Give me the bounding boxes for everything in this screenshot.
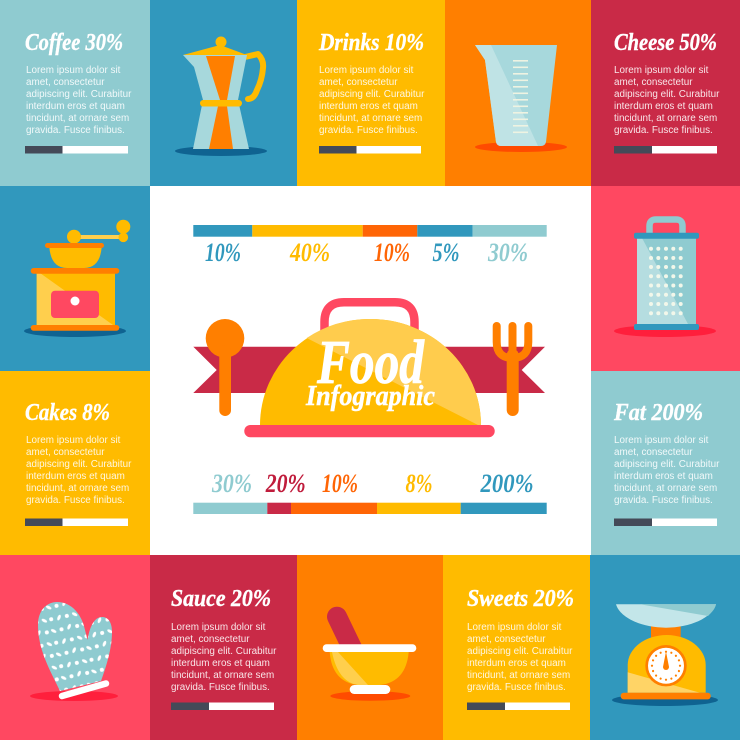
text block: sauce: adipiscing elit. Curabitur <box>171 646 277 657</box>
icon: mortar and pestle <box>323 617 416 701</box>
text block: cakes: tincidunt, at ornare sem <box>26 483 129 494</box>
progress bar: sauce <box>171 702 274 710</box>
title <box>305 329 436 412</box>
panel: cakes <box>25 400 132 526</box>
heading: drinks: Drinks 10% <box>318 30 424 56</box>
text block: cheese: amet, consectetur <box>614 77 693 88</box>
text block: drinks: amet, consectetur <box>319 77 398 88</box>
bottom percentage labels: 20% <box>265 469 306 498</box>
panel: cheese <box>614 30 720 154</box>
text block: cakes: gravida. Fusce finibus. <box>26 495 125 506</box>
bottom percentage labels <box>211 469 533 498</box>
panel: drinks <box>318 30 425 154</box>
text block: fat: interdum eros et quam <box>614 471 713 482</box>
heading: coffee: Coffee 30% <box>25 30 123 56</box>
icon: coffee grinder <box>24 220 130 337</box>
text block: sweets: interdum eros et quam <box>467 658 566 669</box>
top percentage labels: 10% <box>374 238 410 267</box>
top percentage bar <box>193 225 547 237</box>
icon: moka pot <box>175 36 267 156</box>
text block: cheese: adipiscing elit. Curabitur <box>614 89 720 100</box>
text block: cheese: tincidunt, at ornare sem <box>614 113 717 124</box>
progress bar: cakes <box>25 518 128 526</box>
text block: sauce: tincidunt, at ornare sem <box>171 670 274 681</box>
panel: sauce <box>171 586 277 710</box>
top percentage labels <box>205 238 528 267</box>
text block: fat: tincidunt, at ornare sem <box>614 483 717 494</box>
text block: drinks: tincidunt, at ornare sem <box>319 113 422 124</box>
icon: oven mitt <box>30 602 118 701</box>
text block: sauce: amet, consectetur <box>171 634 250 645</box>
title: Food <box>316 329 425 397</box>
top percentage labels: 30% <box>487 238 528 267</box>
text block: fat: Lorem ipsum dolor sit <box>614 435 709 446</box>
top percentage labels: 10% <box>205 238 241 267</box>
bottom percentage labels: 200% <box>480 469 534 498</box>
text block: cakes: Lorem ipsum dolor sit <box>26 435 121 446</box>
heading: cakes: Cakes 8% <box>25 400 110 426</box>
text block: cheese: interdum eros et quam <box>614 101 713 112</box>
cloche dome <box>260 319 481 425</box>
ribbon banner <box>193 347 545 393</box>
text block: coffee: tincidunt, at ornare sem <box>26 113 129 124</box>
text block: drinks: Lorem ipsum dolor sit <box>319 65 414 76</box>
text block: coffee: gravida. Fusce finibus. <box>26 125 125 136</box>
icon: cheese grater <box>614 220 716 337</box>
panel: sweets <box>467 586 574 710</box>
text block: fat: gravida. Fusce finibus. <box>614 495 713 506</box>
top percentage labels: 5% <box>432 238 460 267</box>
heading: sweets: Sweets 20% <box>467 586 574 612</box>
cloche plate <box>244 425 495 437</box>
text block: sauce: Lorem ipsum dolor sit <box>171 622 266 633</box>
text block: sauce: gravida. Fusce finibus. <box>171 682 270 693</box>
bottom percentage labels: 30% <box>211 469 252 498</box>
icon: measuring jug <box>475 45 567 152</box>
progress bar: fat <box>614 518 717 526</box>
text block: sweets: adipiscing elit. Curabitur <box>467 646 573 657</box>
text block: cakes: adipiscing elit. Curabitur <box>26 459 132 470</box>
text block: fat: adipiscing elit. Curabitur <box>614 459 720 470</box>
text block: drinks: adipiscing elit. Curabitur <box>319 89 425 100</box>
bottom percentage labels: 8% <box>406 469 432 498</box>
progress bar: sweets <box>467 702 570 710</box>
text block: coffee: Lorem ipsum dolor sit <box>26 65 121 76</box>
bottom percentage labels: 10% <box>322 469 358 498</box>
text block: coffee: amet, consectetur <box>26 77 105 88</box>
cloche handle <box>324 302 414 340</box>
text block: cakes: interdum eros et quam <box>26 471 125 482</box>
icon: kitchen scale <box>612 604 718 706</box>
bottom percentage bar <box>193 503 547 514</box>
text block: cheese: gravida. Fusce finibus. <box>614 125 713 136</box>
text block: coffee: interdum eros et quam <box>26 101 125 112</box>
icon: fork <box>497 326 528 410</box>
text block: sauce: interdum eros et quam <box>171 658 270 669</box>
text block: sweets: amet, consectetur <box>467 634 546 645</box>
text block: sweets: gravida. Fusce finibus. <box>467 682 566 693</box>
text block: sweets: tincidunt, at ornare sem <box>467 670 570 681</box>
heading: cheese: Cheese 50% <box>614 30 717 56</box>
progress bar: coffee <box>25 146 128 154</box>
text block: drinks: interdum eros et quam <box>319 101 418 112</box>
text block: drinks: gravida. Fusce finibus. <box>319 125 418 136</box>
top percentage labels: 40% <box>289 238 330 267</box>
central food cloche illustration <box>193 302 545 437</box>
heading: fat: Fat 200% <box>613 400 703 426</box>
progress bar: drinks <box>319 146 421 154</box>
panel: fat <box>613 400 720 526</box>
title: Infographic <box>305 381 436 412</box>
progress bar: cheese <box>614 146 717 154</box>
heading: sauce: Sauce 20% <box>171 586 271 612</box>
icon: spoon <box>206 319 244 416</box>
text block: fat: amet, consectetur <box>614 447 693 458</box>
text block: coffee: adipiscing elit. Curabitur <box>26 89 132 100</box>
text block: sweets: Lorem ipsum dolor sit <box>467 622 562 633</box>
text block: cheese: Lorem ipsum dolor sit <box>614 65 709 76</box>
panel: coffee <box>25 30 132 154</box>
text block: cakes: amet, consectetur <box>26 447 105 458</box>
